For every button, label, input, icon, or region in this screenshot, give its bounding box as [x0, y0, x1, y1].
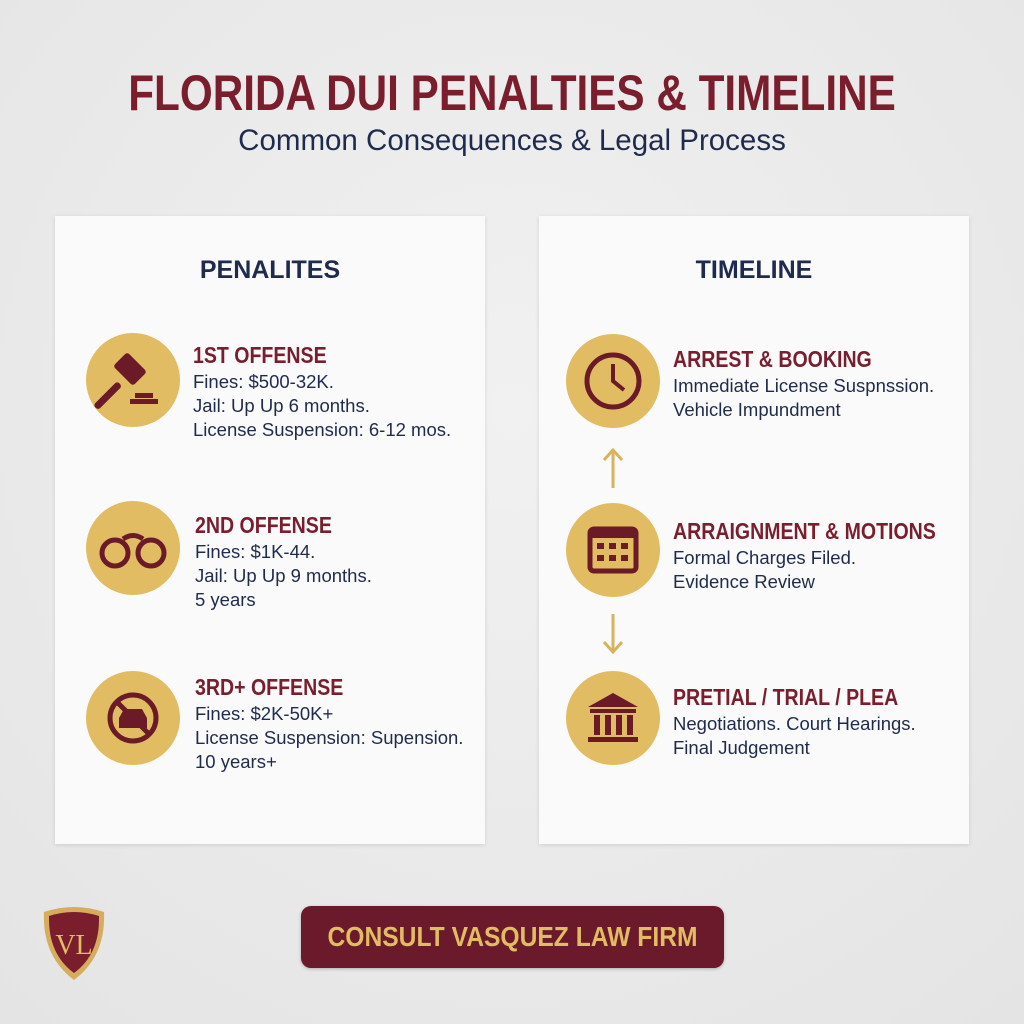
button: consult	[301, 906, 724, 968]
icon: no car	[86, 671, 180, 765]
icon: calendar	[566, 503, 660, 597]
item: pretrial: PRETIAL / TRIAL / PLEA	[673, 684, 898, 710]
title: FLORIDA DUI PENALTIES & TIMELINE	[128, 65, 896, 121]
item: 1st offense: Jail: Up Up 6 months.	[193, 395, 370, 416]
item: 3rd offense	[195, 674, 463, 772]
item: arrest: Vehicle Impundment	[673, 399, 841, 420]
arrow up	[603, 448, 623, 488]
icon: clock	[566, 334, 660, 428]
item: pretrial: Negotiations. Court Hearings.	[673, 713, 916, 734]
item: 1st offense	[193, 342, 451, 440]
item: 2nd offense: 2ND OFFENSE	[195, 512, 332, 538]
item: 2nd offense: Jail: Up Up 9 months.	[195, 565, 372, 586]
item: 3rd offense: License Suspension: Supension.	[195, 727, 463, 748]
logo: VL shield: VL	[55, 930, 93, 961]
heading: penalites: PENALITES	[200, 256, 340, 284]
icon: handcuffs	[86, 501, 180, 595]
button: consult: CONSULT VASQUEZ LAW FIRM	[327, 921, 698, 952]
panel: timeline	[539, 216, 969, 844]
item: 3rd offense: Fines: $2K-50K+	[195, 703, 333, 724]
item: arrest: Immediate License Suspnssion.	[673, 375, 934, 396]
item: 3rd offense: 10 years+	[195, 751, 277, 772]
item: pretrial	[673, 684, 916, 758]
item: 2nd offense: 5 years	[195, 589, 256, 610]
item: pretrial: Final Judgement	[673, 737, 810, 758]
subtitle: Common Consequences & Legal Process	[238, 124, 786, 157]
item: 1st offense: License Suspension: 6-12 mos.	[193, 419, 451, 440]
panel: penalties	[55, 216, 485, 844]
item: arraignment: ARRAIGNMENT & MOTIONS	[673, 518, 936, 544]
item: 2nd offense	[195, 512, 372, 610]
item: 3rd offense: 3RD+ OFFENSE	[195, 674, 343, 700]
arrow down	[603, 614, 623, 654]
icon: courthouse	[566, 671, 660, 765]
item: arrest: ARREST & BOOKING	[673, 346, 872, 372]
item: 1st offense: 1ST OFFENSE	[193, 342, 327, 368]
item: 1st offense: Fines: $500-32K.	[193, 371, 334, 392]
item: 2nd offense: Fines: $1K-44.	[195, 541, 315, 562]
logo: VL shield	[44, 907, 104, 980]
icon: gavel	[86, 333, 180, 427]
item: arrest	[673, 346, 934, 420]
item: arraignment	[673, 518, 936, 592]
heading: timeline: TIMELINE	[696, 256, 812, 284]
item: arraignment: Formal Charges Filed.	[673, 547, 856, 568]
item: arraignment: Evidence Review	[673, 571, 815, 592]
